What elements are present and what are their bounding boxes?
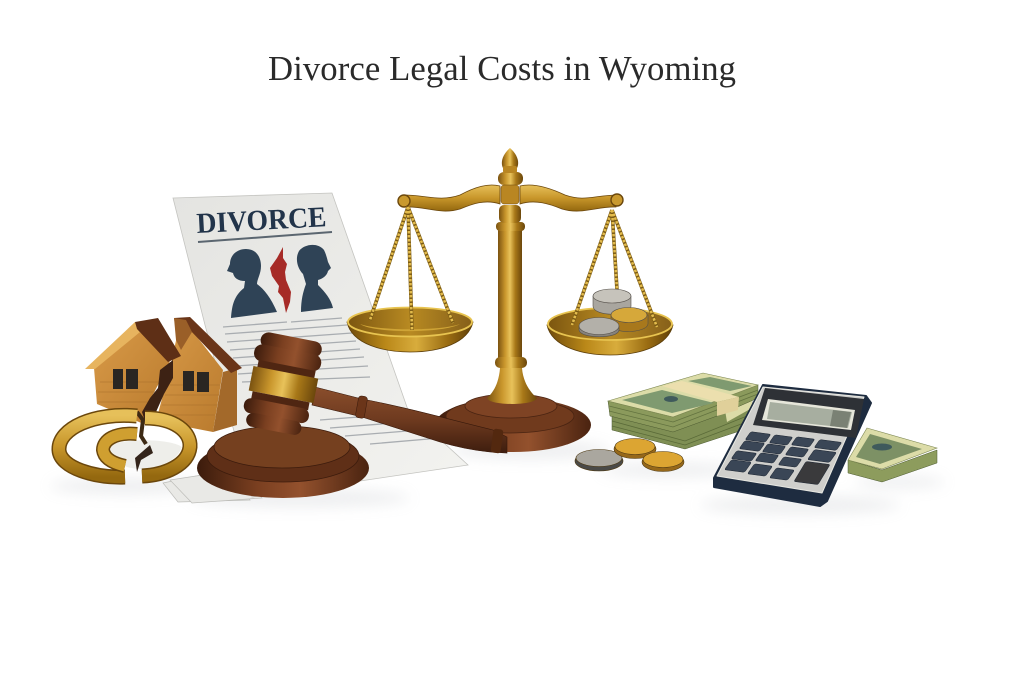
finial (502, 148, 518, 168)
left pan (347, 322, 473, 352)
windows (113, 369, 209, 392)
upper bill stack (608, 385, 758, 432)
money stacks (608, 373, 937, 482)
display screen (767, 402, 852, 428)
broken ring (59, 412, 190, 477)
gavel head (240, 330, 325, 437)
crack and inner paper (108, 440, 182, 469)
left front wall (94, 328, 171, 425)
pillar foot (487, 368, 537, 404)
inner ring curl (103, 434, 137, 466)
left roof (85, 322, 140, 369)
right pan (547, 325, 673, 355)
gold coin (614, 440, 656, 458)
right front wall (156, 328, 223, 432)
display housing (753, 388, 864, 438)
keypad (724, 432, 842, 485)
gavel sound block (197, 438, 369, 498)
paper sheet (173, 193, 468, 497)
right chains (572, 210, 657, 327)
calculator body (714, 385, 871, 506)
balance scale (347, 148, 673, 452)
left chains (370, 207, 453, 330)
gold coin (642, 452, 684, 472)
wooden base (435, 398, 591, 452)
calculator (714, 385, 871, 506)
lower bill stack (612, 398, 752, 449)
paper band (662, 381, 739, 402)
scale beam (404, 185, 500, 211)
gavel handle (312, 387, 507, 453)
loose coins (575, 438, 684, 472)
wall boards (98, 382, 220, 415)
lower stacked pages (163, 470, 262, 503)
broken house (85, 317, 242, 432)
document heading: DIVORCE (196, 201, 327, 240)
ground shadows (50, 441, 945, 514)
right ring band (142, 418, 190, 476)
house crack (142, 360, 173, 424)
document text lines (223, 318, 440, 444)
divorce document (163, 193, 468, 503)
right roof (174, 317, 242, 373)
gold band (249, 366, 318, 403)
right side wall (213, 368, 237, 432)
gavel (197, 330, 507, 498)
title: Divorce Legal Costs in Wyoming (268, 49, 736, 88)
silhouette: man (227, 249, 277, 318)
right bill stack (848, 450, 937, 482)
silhouette: woman (297, 245, 333, 312)
pillar (498, 230, 522, 358)
coins on pan (579, 289, 648, 337)
red crack (270, 247, 291, 313)
left ring band (59, 415, 137, 477)
silver coin (575, 451, 623, 471)
heading rule (198, 232, 332, 242)
